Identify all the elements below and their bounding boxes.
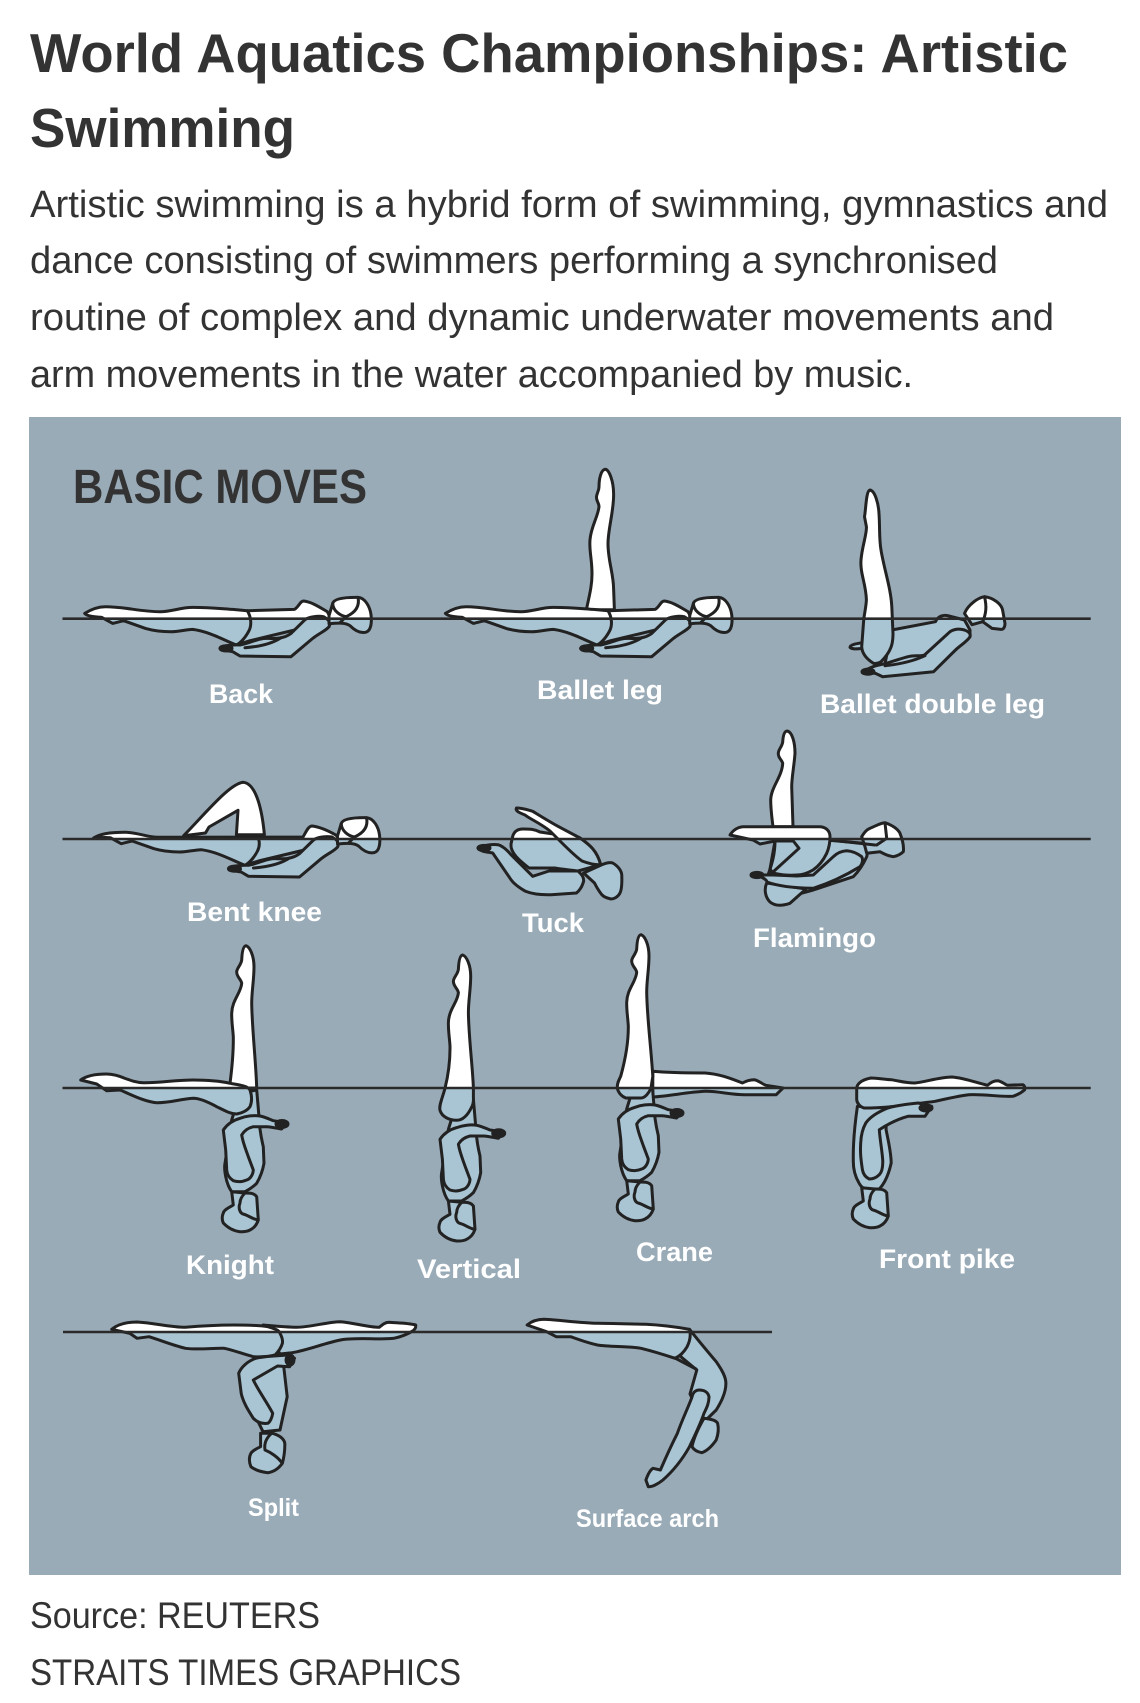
title: Swimming xyxy=(30,97,295,159)
source credit: Source: REUTERS xyxy=(30,1595,320,1636)
figure: flamingo xyxy=(730,731,904,905)
label: Bent knee: Bent knee xyxy=(187,897,322,927)
label: Knight: Knight xyxy=(186,1250,274,1280)
label: Back: Back xyxy=(209,679,274,709)
figure: surface arch xyxy=(527,1319,726,1487)
figure: ballet double leg xyxy=(850,490,1005,677)
figure: tuck xyxy=(478,808,622,899)
label: Split: Split xyxy=(248,1494,300,1522)
water line: row 1 xyxy=(62,617,1091,620)
label: Vertical: Vertical xyxy=(417,1254,521,1284)
figure: split xyxy=(112,1322,416,1473)
figure: back xyxy=(85,597,371,657)
panel: basic moves xyxy=(29,417,1121,1575)
figure: bent knee xyxy=(94,782,380,877)
description text xyxy=(30,184,1108,396)
label: Front pike: Front pike xyxy=(879,1244,1015,1274)
figure: ballet leg xyxy=(445,469,732,657)
label: Tuck: Tuck xyxy=(522,908,585,938)
label: Crane: Crane xyxy=(636,1237,713,1267)
label: Ballet leg: Ballet leg xyxy=(537,675,663,705)
water line: row 4 xyxy=(63,1331,772,1333)
figure: vertical xyxy=(439,955,505,1241)
title xyxy=(30,22,1068,159)
label: Surface arch: Surface arch xyxy=(576,1505,719,1533)
label: Flamingo: Flamingo xyxy=(753,923,876,953)
source credit: STRAITS TIMES GRAPHICS xyxy=(30,1652,461,1693)
figure: knight xyxy=(81,946,288,1232)
water line: row 3 xyxy=(62,1087,1091,1089)
figure: crane xyxy=(617,935,783,1221)
description text: routine of complex and dynamic underwater movements and xyxy=(30,297,1054,339)
source credit xyxy=(30,1595,461,1693)
water line: row 2 xyxy=(62,838,1091,840)
description text: Artistic swimming is a hybrid form of swimming, gymnastics and xyxy=(30,184,1108,226)
description text: arm movements in the water accompanied by music. xyxy=(30,354,913,396)
title: World Aquatics Championships: Artistic xyxy=(30,22,1068,84)
label: Ballet double leg: Ballet double leg xyxy=(820,689,1045,719)
figure: front pike xyxy=(852,1077,1025,1228)
panel heading: BASIC MOVES xyxy=(73,461,367,514)
description text: dance consisting of swimmers performing a synchronised xyxy=(30,240,998,282)
